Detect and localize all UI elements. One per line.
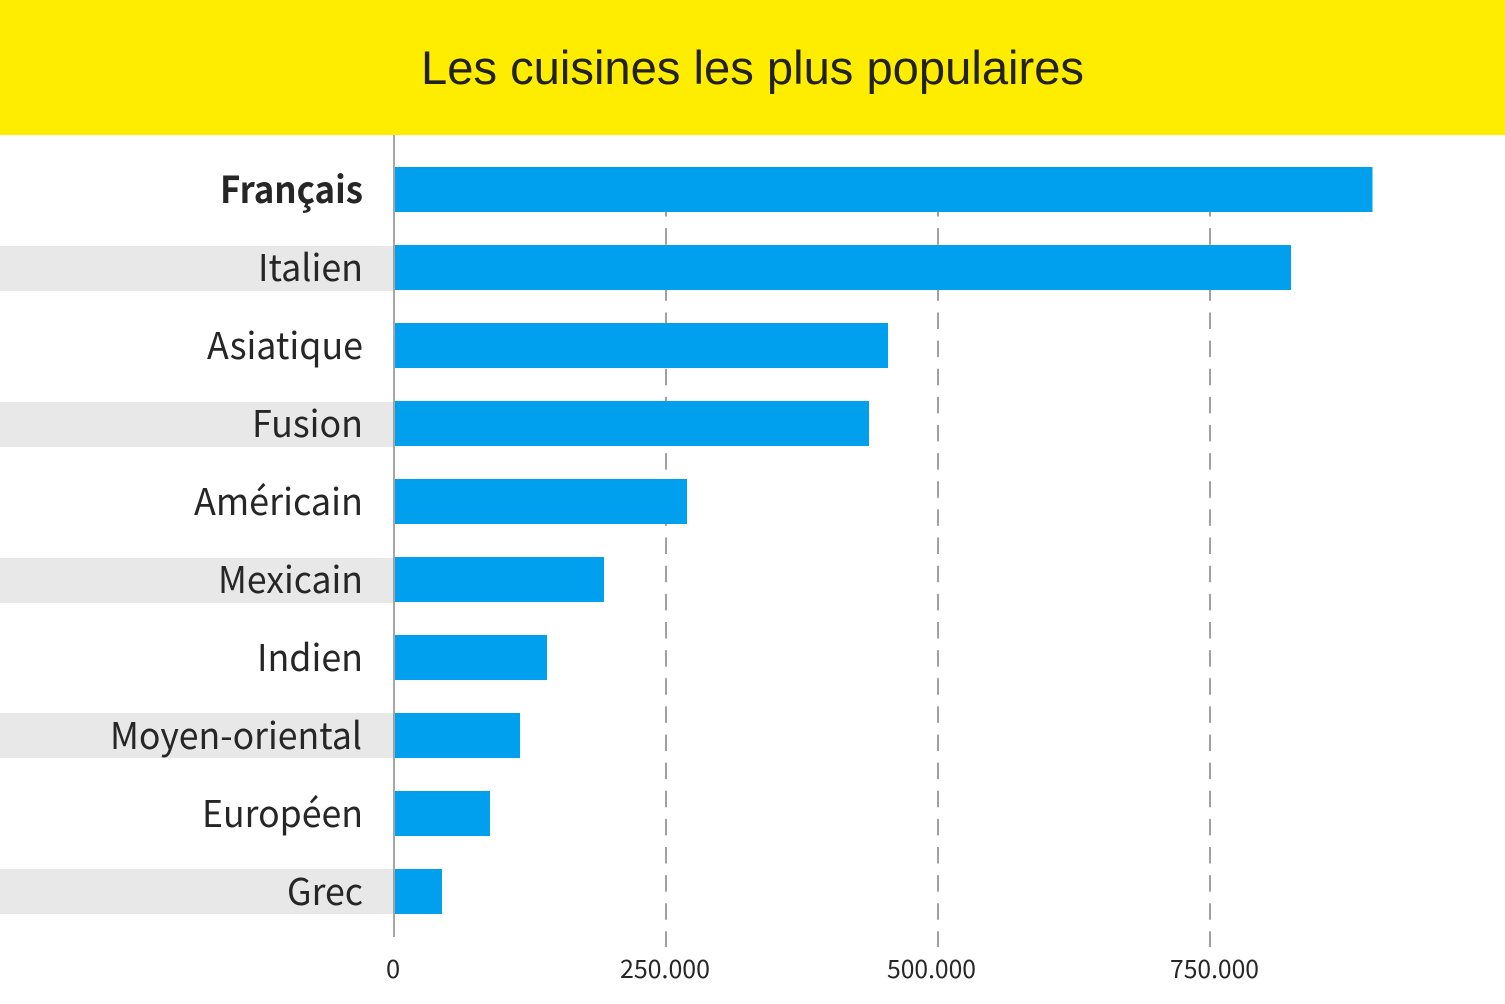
bar: Fusion — [395, 401, 869, 446]
label: Grec: Grec — [287, 862, 363, 916]
alternating row bands — [0, 246, 394, 914]
bar: Moyen-oriental — [395, 713, 520, 758]
title: Les cuisines les plus populaires — [421, 41, 1084, 94]
tick: 500.000: 500.000 — [887, 949, 976, 986]
bar: Indien — [395, 635, 547, 680]
bar: Grec — [395, 869, 442, 914]
bars — [395, 167, 1372, 914]
bar: Européen — [395, 791, 490, 836]
category labels — [110, 160, 363, 916]
axis value labels — [386, 949, 1259, 986]
bar: Italien — [395, 245, 1291, 290]
vertical axis line — [393, 135, 395, 937]
label: Moyen-oriental: Moyen-oriental — [110, 706, 362, 760]
label: Français: Français — [220, 160, 363, 214]
tick: 750.000: 750.000 — [1170, 949, 1259, 986]
label: Fusion: Fusion — [252, 394, 363, 448]
label: Mexicain: Mexicain — [218, 550, 363, 604]
label: Américain: Américain — [194, 472, 363, 526]
dashed grid lines — [666, 200, 1210, 947]
bar: Français — [395, 167, 1372, 212]
label: Indien: Indien — [257, 628, 363, 682]
title banner — [0, 0, 1505, 135]
label: Italien: Italien — [258, 238, 363, 292]
bar: Américain — [395, 479, 687, 524]
bar: Mexicain — [395, 557, 604, 602]
label: Asiatique: Asiatique — [207, 316, 363, 370]
tick: 250.000: 250.000 — [620, 949, 710, 986]
label: Européen: Européen — [202, 784, 363, 838]
bar: Asiatique — [395, 323, 888, 368]
tick: 0: 0 — [386, 949, 400, 986]
